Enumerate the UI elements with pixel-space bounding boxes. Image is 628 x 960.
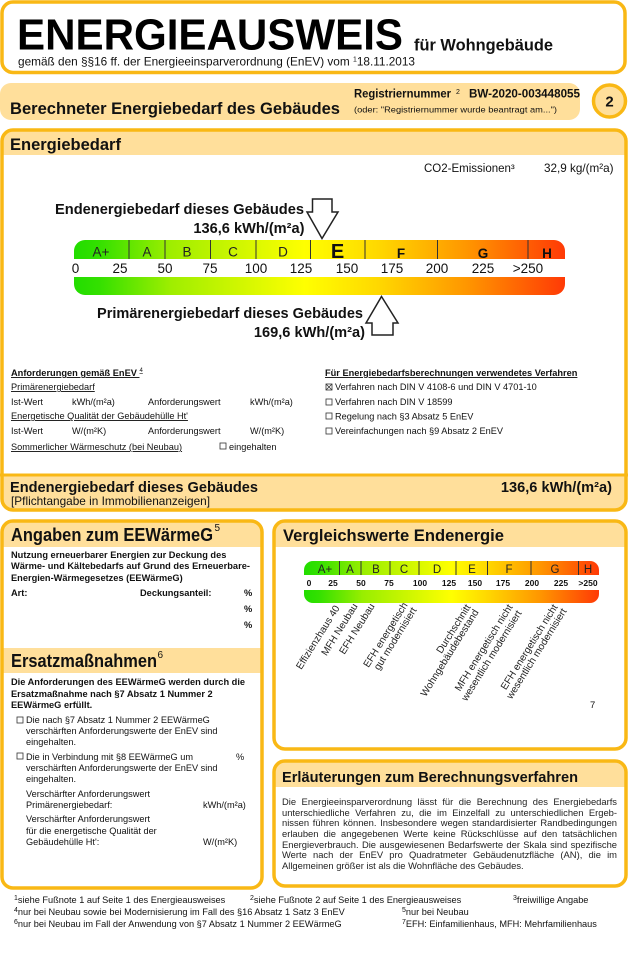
renewable energy text: Deckungsanteil: <box>140 588 211 598</box>
comparison scale: numbers: 175 <box>496 578 510 588</box>
arrow: primary energy marker <box>366 296 398 335</box>
explanation text: erlauben die angegebenen Werte keine Rückschlüsse auf den tatsächlichen <box>282 828 617 839</box>
subtitle: für Wohngebäude: für Wohngebäude <box>414 36 553 54</box>
substitute measures list: verschärften Anforderungswerte der EnEV sind <box>26 726 218 736</box>
substitute measures list: eingehalten. <box>26 774 76 784</box>
footnote marker 6: 6 <box>158 650 164 661</box>
renewable energy text <box>11 550 252 630</box>
substitute measures list: Primärenergiebedarf: <box>26 800 112 810</box>
rotated building type labels: Wohngebäudebestand <box>419 608 482 699</box>
comparison scale: numbers: 150 <box>468 578 482 588</box>
comparison scale: classes: A+ <box>318 564 332 576</box>
substitute measures list: Verschärfter Anforderungswert <box>26 814 151 824</box>
explanation text: unterschiedliche Verfahren zu, die im Einzelfall zu unterschiedlichen Ergeb- <box>282 807 617 818</box>
renewable energy text: Nutzung erneuerbarer Energien zur Deckung des <box>11 550 226 560</box>
footnotes: nur bei Neubau sowie bei Modernisierung im Fall des §16 Absatz 1 Satz 3 EnEV <box>18 907 346 917</box>
rotated building type labels: wesentlich modernisiert <box>459 609 525 704</box>
panel: Erläuterungen zum Berechnungsverfahren <box>274 761 626 886</box>
registration number: BW-2020-003448055 <box>469 88 581 100</box>
title: ENERGIEAUSWEIS <box>17 12 403 60</box>
legal basis line: gemäß den §§16 ff. der Energieeinsparverordnung (EnEV) vom <box>18 54 355 68</box>
renewable energy text: % <box>244 604 252 614</box>
substitute measures list: Die nach §7 Absatz 1 Nummer 2 EEWärmeG <box>26 715 210 725</box>
comparison scale: classes: A <box>346 564 354 576</box>
requirements block: Primärenergiebedarf <box>11 382 95 392</box>
requirements block: Anforderungswert <box>148 426 221 436</box>
renewable energy text: % <box>244 620 252 630</box>
panel: header <box>2 2 625 72</box>
footnotes: 6 <box>14 919 18 926</box>
rotated building type labels: EFH energetisch <box>362 601 411 670</box>
substitute measures list: kWh/(m²a) <box>203 800 246 810</box>
renewable energy text: Wärme- und Kältebedarfs auf Grund des Erneuerbare- <box>11 561 250 571</box>
substitute measures list: verschärften Anforderungswerte der EnEV sind <box>26 763 218 773</box>
rotated building type labels: Effizienzhaus 40 <box>294 603 343 672</box>
energy scale: classes: A <box>142 244 152 260</box>
rotated building type labels: Durchschnitt <box>435 603 474 656</box>
energy scale: numbers: 175 <box>381 261 403 276</box>
comparison scale: numbers: 100 <box>413 578 427 588</box>
calculation method block: Verfahren nach DIN V 18599 <box>335 397 452 407</box>
mandatory end energy value: 136,6 kWh/(m²a) <box>501 480 612 496</box>
explanation text: nissen führen können. Insbesondere wegen standardisierter Randbedingungen <box>282 817 617 828</box>
panel: Energiebedarf <box>0 130 628 510</box>
end energy callout <box>55 202 305 237</box>
substitute measures intro <box>11 677 245 710</box>
comparison scale: classes: D <box>433 564 441 576</box>
explanation text: Werte nach der EnEV pro Quadratmeter Gebäudenutzfläche (AN), die im <box>282 849 617 860</box>
CO2 emissions: CO2-Emissionen³ <box>424 163 515 175</box>
substitute measures intro: EEWärmeG erfüllt. <box>11 700 92 710</box>
comparison scale: numbers: 200 <box>525 578 539 588</box>
comparison scale: gradient bar <box>304 590 599 603</box>
rotated building type labels <box>294 601 570 704</box>
substitute measures list <box>17 715 246 847</box>
explanation text: Allgemeinen größer ist als die Wohnfläche des Gebäudes. <box>282 860 524 871</box>
substitute measures list: Gebäudehülle Ht': <box>26 837 99 847</box>
comparison scale: classes: H <box>584 564 592 576</box>
calculation method block: Vereinfachungen nach §9 Absatz 2 EnEV <box>335 426 504 436</box>
comparison scale: numbers: 125 <box>442 578 456 588</box>
energy scale: numbers <box>72 261 543 276</box>
registration label: Registriernummer <box>354 88 452 100</box>
calculation method block: Verfahren nach DIN V 4108-6 und DIN V 4701-10 <box>335 382 537 392</box>
energy scale: classes: H <box>542 246 552 261</box>
rotated building type labels: gut modernisiert <box>372 606 420 672</box>
rotated building type labels: MFH energetisch nicht <box>453 603 516 693</box>
footnotes: siehe Fußnote 2 auf Seite 1 des Energieausweises <box>254 895 462 905</box>
comparison scale: classes: C <box>400 564 408 576</box>
heading: Erläuterungen zum Berechnungsverfahren <box>282 770 578 786</box>
energy scale: classes: F <box>397 246 405 261</box>
renewable energy text: Energien-Wärmegesetzes (EEWärmeG) <box>11 573 183 583</box>
energy scale: classes: A+ <box>93 244 110 260</box>
footnotes: 2 <box>250 895 254 902</box>
requirements block <box>11 368 293 452</box>
explanation text: Energieverbrauch. Die ausgewiesenen Bedarfswerte der Skala sind spezifische <box>282 839 617 850</box>
substitute measures list: % <box>236 752 244 762</box>
requirements block: Anforderungen gemäß EnEV <box>11 368 137 378</box>
energy scale: numbers: 125 <box>290 261 312 276</box>
footnote marker 5: 5 <box>214 523 220 534</box>
energy scale: numbers: 25 <box>112 261 128 276</box>
energy scale: classes: C <box>228 244 238 260</box>
calculation method block: Regelung nach §3 Absatz 5 EnEV <box>335 412 474 422</box>
page number badge <box>594 85 626 117</box>
footnotes: EFH: Einfamilienhaus, MFH: Mehrfamilienhaus <box>406 919 597 929</box>
mandatory end energy value: Endenergiebedarf dieses Gebäudes <box>10 480 258 496</box>
registration note: (oder: "Registriernummer wurde beantragt am...") <box>354 104 557 114</box>
substitute measures intro: Die Anforderungen des EEWärmeG werden durch die <box>11 677 245 687</box>
comparison scale: classes <box>304 561 599 576</box>
footnotes: 7 <box>402 919 406 926</box>
substitute measures list: Verschärfter Anforderungswert <box>26 789 151 799</box>
primary energy callout: Primärenergiebedarf dieses Gebäudes <box>97 306 363 322</box>
footnotes: nur bei Neubau <box>406 907 469 917</box>
footnotes: 4 <box>14 907 18 914</box>
end energy callout: Endenergiebedarf dieses Gebäudes <box>55 202 304 218</box>
registration footnote marker: 2 <box>456 89 460 96</box>
renewable energy text: Art: <box>11 588 27 598</box>
band: calculated energy demand heading <box>0 83 581 120</box>
comparison scale: numbers: 50 <box>356 578 366 588</box>
page number badge: 2 <box>605 94 614 110</box>
comparison scale: classes: B <box>372 564 380 576</box>
requirements block: W/(m²K) <box>72 426 106 436</box>
arrow: end energy marker <box>307 199 338 238</box>
comparison scale: numbers: 0 <box>307 578 312 588</box>
heading: Energiebedarf <box>10 136 121 154</box>
requirements block: Ist-Wert <box>11 426 43 436</box>
footnote marker 7: 7 <box>590 700 595 711</box>
mandatory end energy value <box>10 480 612 508</box>
energy scale: numbers: 225 <box>472 261 494 276</box>
calculation method block: Für Energiebedarfsberechnungen verwendetes Verfahren <box>325 368 578 378</box>
comparison scale: numbers: >250 <box>578 578 598 588</box>
end energy callout: 136,6 kWh/(m²a) <box>193 221 305 237</box>
requirements block: eingehalten <box>229 442 277 452</box>
requirements block: W/(m²K) <box>250 426 284 436</box>
heading: Angaben zum EEWärmeG: Angaben zum EEWärmeG <box>11 525 213 545</box>
footnotes: 5 <box>402 907 406 914</box>
energy scale: classes: D <box>278 244 288 260</box>
substitute measures list: für die energetische Qualität der <box>26 826 157 836</box>
requirements block: kWh/(m²a) <box>72 397 115 407</box>
requirements block: Sommerlicher Wärmeschutz (bei Neubau) <box>11 442 182 452</box>
legal basis line: 18.11.2013 <box>357 54 415 68</box>
legal basis line: 1 <box>353 56 357 64</box>
substitute measures list: Die in Verbindung mit §8 EEWärmeG um <box>26 752 193 762</box>
comparison scale: classes: F <box>505 564 513 576</box>
panel: EEWärmeG and substitute measures <box>2 521 262 888</box>
rotated building type labels: wesentlich modernisiert <box>504 607 570 702</box>
rotated building type labels: EFH energetisch nicht <box>499 603 561 692</box>
requirements block: Anforderungswert <box>148 397 221 407</box>
energy scale: classes: G <box>478 246 488 261</box>
requirements block: 4 <box>139 368 143 374</box>
primary energy callout <box>97 306 365 341</box>
requirements block: Energetische Qualität der Gebäudehülle Ht' <box>11 411 188 421</box>
energy scale: classes <box>74 240 565 263</box>
energy scale: numbers: 100 <box>245 261 267 276</box>
comparison scale: numbers <box>307 578 598 588</box>
comparison scale: classes: G <box>551 564 560 576</box>
comparison scale: numbers: 225 <box>554 578 568 588</box>
energy scale: classes: B <box>182 244 192 260</box>
footnotes: 3 <box>513 895 517 902</box>
calculation method block <box>325 368 578 436</box>
heading: Vergleichswerte Endenergie <box>283 527 504 545</box>
substitute measures list: eingehalten. <box>26 737 76 747</box>
footnotes: siehe Fußnote 1 auf Seite 1 des Energieausweises <box>18 895 226 905</box>
energy scale: numbers: 50 <box>157 261 173 276</box>
heading: Berechneter Energiebedarf des Gebäudes <box>10 100 340 118</box>
footnotes <box>14 895 597 929</box>
requirements block: kWh/(m²a) <box>250 397 293 407</box>
mandatory end energy value: [Pflichtangabe in Immobilienanzeigen] <box>11 494 210 508</box>
energy scale: numbers: 200 <box>426 261 448 276</box>
energy scale: numbers: 150 <box>336 261 358 276</box>
panel: Vergleichswerte Endenergie <box>274 521 626 749</box>
comparison scale: numbers: 25 <box>328 578 338 588</box>
energy scale: numbers: 0 <box>72 261 79 276</box>
footnotes: 1 <box>14 895 18 902</box>
panel: Energiebedarf: 32,9 kg/(m²a) <box>544 162 614 175</box>
substitute measures list: W/(m²K) <box>203 837 237 847</box>
requirements block: Ist-Wert <box>11 397 43 407</box>
energy scale: classes: E <box>331 241 344 263</box>
heading: Ersatzmaßnahmen: Ersatzmaßnahmen <box>11 651 157 671</box>
comparison scale: numbers: 75 <box>384 578 394 588</box>
rotated building type labels: EFH Neubau <box>338 602 378 657</box>
footnotes: nur bei Neubau im Fall der Anwendung von §7 Absatz 1 Nummer 2 EEWärmeG <box>18 919 342 929</box>
footnotes: freiwillige Angabe <box>517 895 588 905</box>
rotated building type labels: MFH Neubau <box>320 602 361 658</box>
energy scale: numbers: 75 <box>202 261 218 276</box>
renewable energy text: % <box>244 588 252 598</box>
energy scale: gradient bar <box>74 277 565 295</box>
substitute measures intro: Ersatzmaßnahme nach §7 Absatz 1 Nummer 2 <box>11 689 213 699</box>
energy scale: numbers: >250 <box>513 261 543 276</box>
explanation text <box>282 797 617 875</box>
comparison scale: classes: E <box>468 564 476 576</box>
primary energy callout: 169,6 kWh/(m²a) <box>254 325 365 341</box>
